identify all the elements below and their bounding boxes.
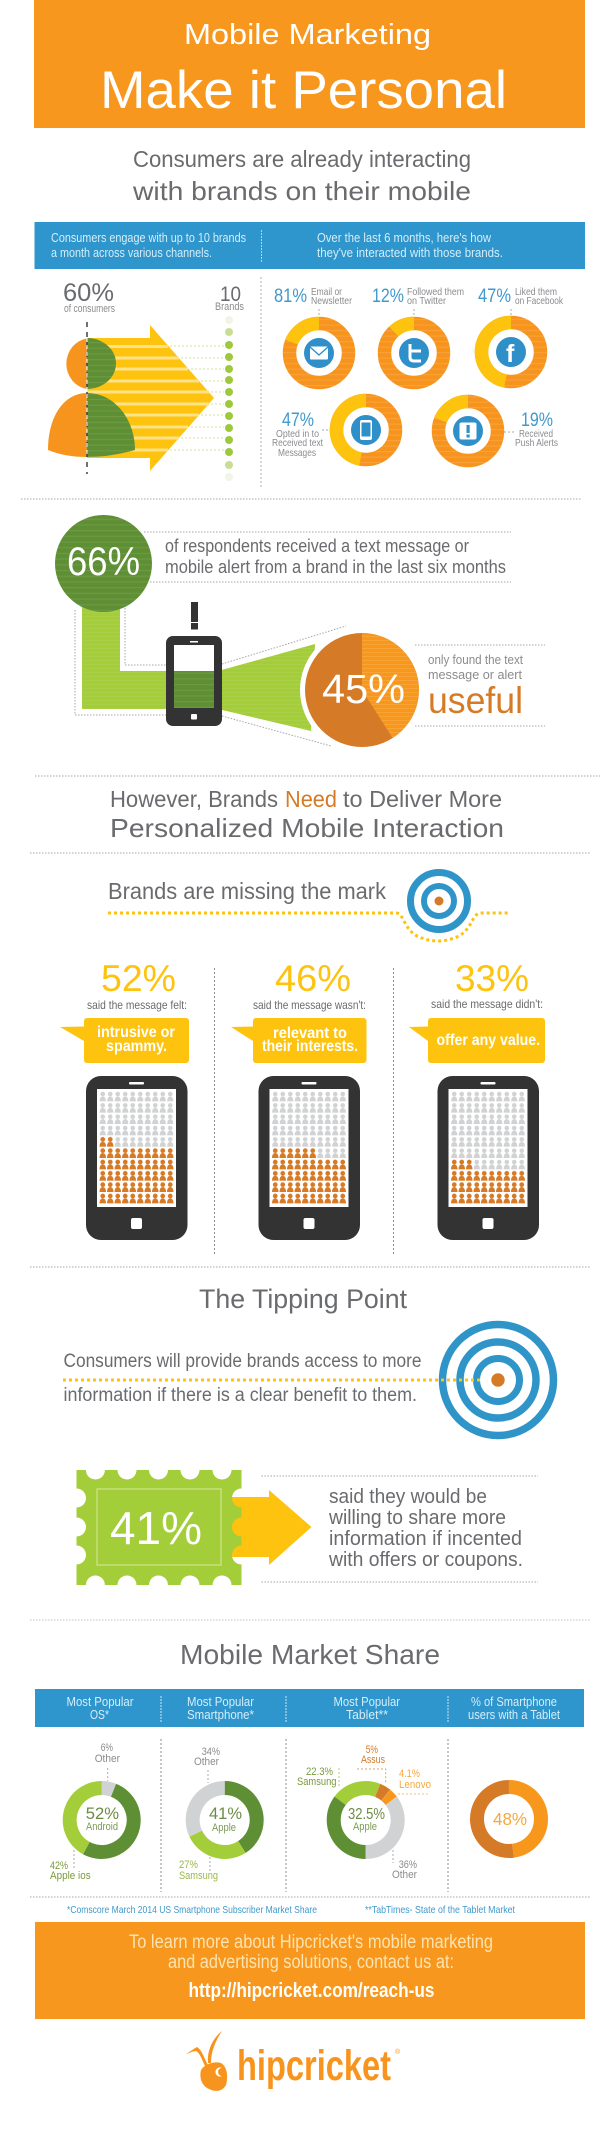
stamp: 41%: 41% [110, 1502, 202, 1554]
callout: relevant: their interests. [262, 1038, 358, 1055]
blue header bar: a month across various channels. [51, 246, 212, 260]
text: consumers will provide access [64, 1351, 422, 1406]
blue market share header: % of Smartphone [471, 1695, 557, 1709]
donut: push alerts: Push Alerts [515, 437, 558, 449]
heading: consumers interacting [132, 146, 471, 206]
donut chart: most popular tablet: 36% [399, 1859, 417, 1871]
hipcricket logo: ® [395, 2048, 401, 2056]
heading: consumers interacting: with brands on their mobile [132, 176, 471, 206]
panel: 66 percent received alerts [55, 515, 545, 752]
donut chart: most popular smartphone: Apple [212, 1822, 236, 1834]
donut chart: most popular smartphone: 34% [202, 1746, 220, 1758]
heading: the tipping point: The Tipping Point [199, 1284, 407, 1314]
blue market share header [35, 1689, 584, 1727]
heading: personalized mobile interaction: Personalized Mobile Interaction [110, 813, 504, 843]
phone with people grid [438, 1076, 539, 1240]
donut chart: smartphone users with a tablet: 48% [493, 1809, 527, 1829]
column: 46 percent: said the message wasn't: [253, 998, 366, 1012]
icon: small target [410, 872, 468, 930]
ten brand dots [225, 316, 233, 481]
heading: mobile market share: Mobile Market Share [180, 1639, 440, 1670]
phone with people grid [86, 1076, 188, 1240]
callout: intrusive [60, 1018, 189, 1063]
title banner: Mobile Marketing [184, 19, 431, 51]
column: 52 percent: 52% [101, 958, 176, 999]
heading: consumers interacting: Consumers are already interacting [133, 146, 471, 172]
column: 33 percent: said the message didn't: [431, 997, 543, 1011]
donut: email: Email or [311, 286, 342, 298]
blue header bar: Over the last 6 months, here's how [317, 231, 492, 245]
pie: 45% useful [300, 628, 424, 752]
callout: intrusive: spammy. [106, 1038, 167, 1055]
blue header bar [34, 222, 585, 269]
column: 46 percent: 46% [275, 958, 351, 999]
heading: personalized mobile interaction: to Deliver More [343, 786, 502, 812]
donut chart: most popular tablet: Other [392, 1869, 417, 1881]
donut: text messages [272, 395, 401, 465]
green L connector [75, 605, 170, 715]
donut chart: most popular OS: 42% [50, 1860, 68, 1872]
stat: 60%: of consumers [64, 303, 115, 315]
donut chart: most popular smartphone [179, 1746, 269, 1882]
donut: facebook: 47% [478, 286, 511, 307]
icon: cricket [186, 2031, 227, 2091]
stat: 10 brands: 10 [220, 283, 241, 306]
donut: text messages: Received text [272, 437, 323, 449]
footer call to action: and advertising solutions, contact us at: [168, 1952, 454, 1973]
text: respondents: of respondents received a text message or [165, 536, 469, 556]
donut chart: most popular smartphone: 27% [179, 1859, 198, 1871]
stat: 10 brands: Brands [215, 301, 244, 313]
column: 52 percent [60, 958, 189, 1240]
donut: facebook: Liked them [515, 286, 557, 298]
donut chart: most popular OS: Android [86, 1821, 118, 1833]
hipcricket logo [186, 2031, 401, 2091]
donut: facebook: on Facebook [515, 295, 564, 307]
pie: 45% useful: 45% [322, 666, 405, 712]
heading: personalized mobile interaction: However, Brands [110, 786, 278, 812]
donut chart: most popular tablet [297, 1744, 431, 1881]
text: respondents: mobile alert from a brand in the last six months [165, 557, 506, 577]
column: 52 percent: said the message felt: [87, 998, 187, 1012]
donut chart: most popular smartphone: 41% [209, 1804, 242, 1823]
panel: 60 percent of consumers [48, 279, 244, 481]
callout: intrusive: intrusive or [97, 1024, 175, 1041]
donut chart: most popular tablet: 4.1% [399, 1768, 420, 1780]
donut: twitter: on Twitter [407, 295, 446, 307]
text: willing to share: willing to share more [328, 1507, 506, 1529]
donut chart: most popular smartphone: Samsung [179, 1870, 218, 1882]
donut: facebook [476, 286, 564, 387]
stat circle: 66%: 66% [67, 540, 140, 584]
donut chart: most popular tablet: 5% [366, 1744, 378, 1756]
callout: relevant: relevant to [273, 1025, 347, 1042]
stamp: 41% [76, 1470, 242, 1585]
stat: 60%: 60% [63, 279, 114, 307]
icon: large target [63, 1324, 554, 1436]
phone with people grid [258, 1076, 360, 1240]
callout: offer any value: offer any value. [436, 1032, 540, 1049]
donut chart: most popular tablet: 22.3% [306, 1766, 333, 1778]
subheading: brands missing the mark: Brands are missing the mark [108, 878, 386, 904]
blue header bar: they've interacted with those brands. [317, 246, 503, 260]
donut: email [274, 286, 357, 391]
donut: email: 81% [274, 286, 307, 307]
donut: text messages: 47% [282, 410, 314, 431]
text: respondents [144, 532, 511, 582]
footer call to action: http://hipcricket.com/reach-us [188, 1980, 434, 2002]
donut chart: most popular OS: Apple ios [50, 1870, 91, 1882]
donut: push alerts: 19% [521, 410, 553, 431]
donut chart: most popular tablet: Lenovo [399, 1779, 431, 1791]
heading: personalized mobile interaction [110, 786, 504, 843]
donut: twitter: Followed them [407, 286, 464, 298]
stat circle: 66% [55, 515, 152, 612]
donut: email: Newsletter [311, 295, 352, 307]
blue market share header: OS* [90, 1708, 109, 1722]
donut: text messages: Messages [278, 447, 316, 459]
donut chart: most popular tablet: 32.5% [348, 1806, 385, 1823]
source footnotes [67, 1904, 515, 1916]
blue market share header: Most Popular [187, 1695, 254, 1709]
donut chart: most popular tablet: Apple [353, 1821, 377, 1833]
title banner: Make it Personal [100, 61, 507, 120]
title banner [34, 0, 585, 128]
donut: facebook: f [506, 340, 515, 368]
text: useful: only found the text [428, 652, 523, 667]
blue market share header: Tablet** [346, 1708, 388, 1722]
donut: push alerts: Received [519, 428, 553, 440]
donut: text messages: Opted in to [276, 428, 319, 440]
footer call to action: To learn more about Hipcricket's mobile marketing [129, 1932, 493, 1953]
blue header bar: Consumers engage with up to 10 brands [51, 231, 246, 245]
panel: brand interactions [272, 286, 564, 469]
person icon [48, 338, 135, 457]
callout: offer any value [409, 1018, 545, 1063]
footer call to action [35, 1922, 585, 2019]
green cone [218, 626, 346, 746]
donut: twitter [372, 286, 464, 395]
text: willing to share: with offers or coupons. [328, 1549, 523, 1571]
blue market share header: Most Popular [334, 1695, 400, 1709]
callout: relevant [231, 1018, 366, 1063]
coupon with arrow [76, 1470, 312, 1585]
donut chart: most popular OS: 6% [101, 1742, 113, 1754]
text: consumers will provide access: Consumers will provide brands access to more [64, 1351, 422, 1372]
donut chart: most popular tablet: Samsung [297, 1776, 336, 1788]
text: useful: useful [428, 680, 523, 721]
text: useful: message or alert [428, 667, 522, 682]
column: 33 percent [409, 958, 545, 1240]
donut: twitter: 12% [372, 286, 404, 307]
stat: 10 brands [215, 283, 244, 313]
phone with alert [166, 602, 222, 726]
text: willing to share [262, 1476, 538, 1582]
donut chart: most popular smartphone: Other [194, 1756, 219, 1768]
donut chart: most popular OS [50, 1742, 145, 1882]
source footnotes: **TabTimes- State of the Tablet Market [365, 1904, 515, 1916]
column: 46 percent [231, 958, 366, 1240]
heading: personalized mobile interaction: Need [285, 786, 337, 812]
column: 33 percent: 33% [455, 958, 529, 999]
donut chart: most popular tablet: Assus [361, 1754, 385, 1766]
text: useful [415, 645, 545, 726]
hipcricket logo: hipcricket [237, 2042, 391, 2090]
text: consumers will provide access: information if there is a clear benefit to them. [64, 1385, 417, 1406]
text: willing to share: said they would be [329, 1486, 487, 1508]
subheading: brands missing the mark [108, 872, 508, 941]
donut: push alerts [430, 393, 558, 469]
blue market share header: users with a Tablet [468, 1708, 560, 1722]
source footnotes: *Comscore March 2014 US Smartphone Subscriber Market Share [67, 1904, 317, 1916]
arrow with stripes [87, 325, 224, 471]
arrow [225, 1490, 312, 1565]
blue market share header: Smartphone* [187, 1708, 254, 1722]
donut chart: smartphone users with a tablet [473, 1783, 545, 1855]
donut chart: most popular OS: 52% [86, 1804, 119, 1823]
blue market share header: Most Popular [66, 1695, 134, 1709]
text: willing to share: information if incented [329, 1528, 522, 1550]
donut chart: most popular OS: Other [95, 1753, 120, 1765]
